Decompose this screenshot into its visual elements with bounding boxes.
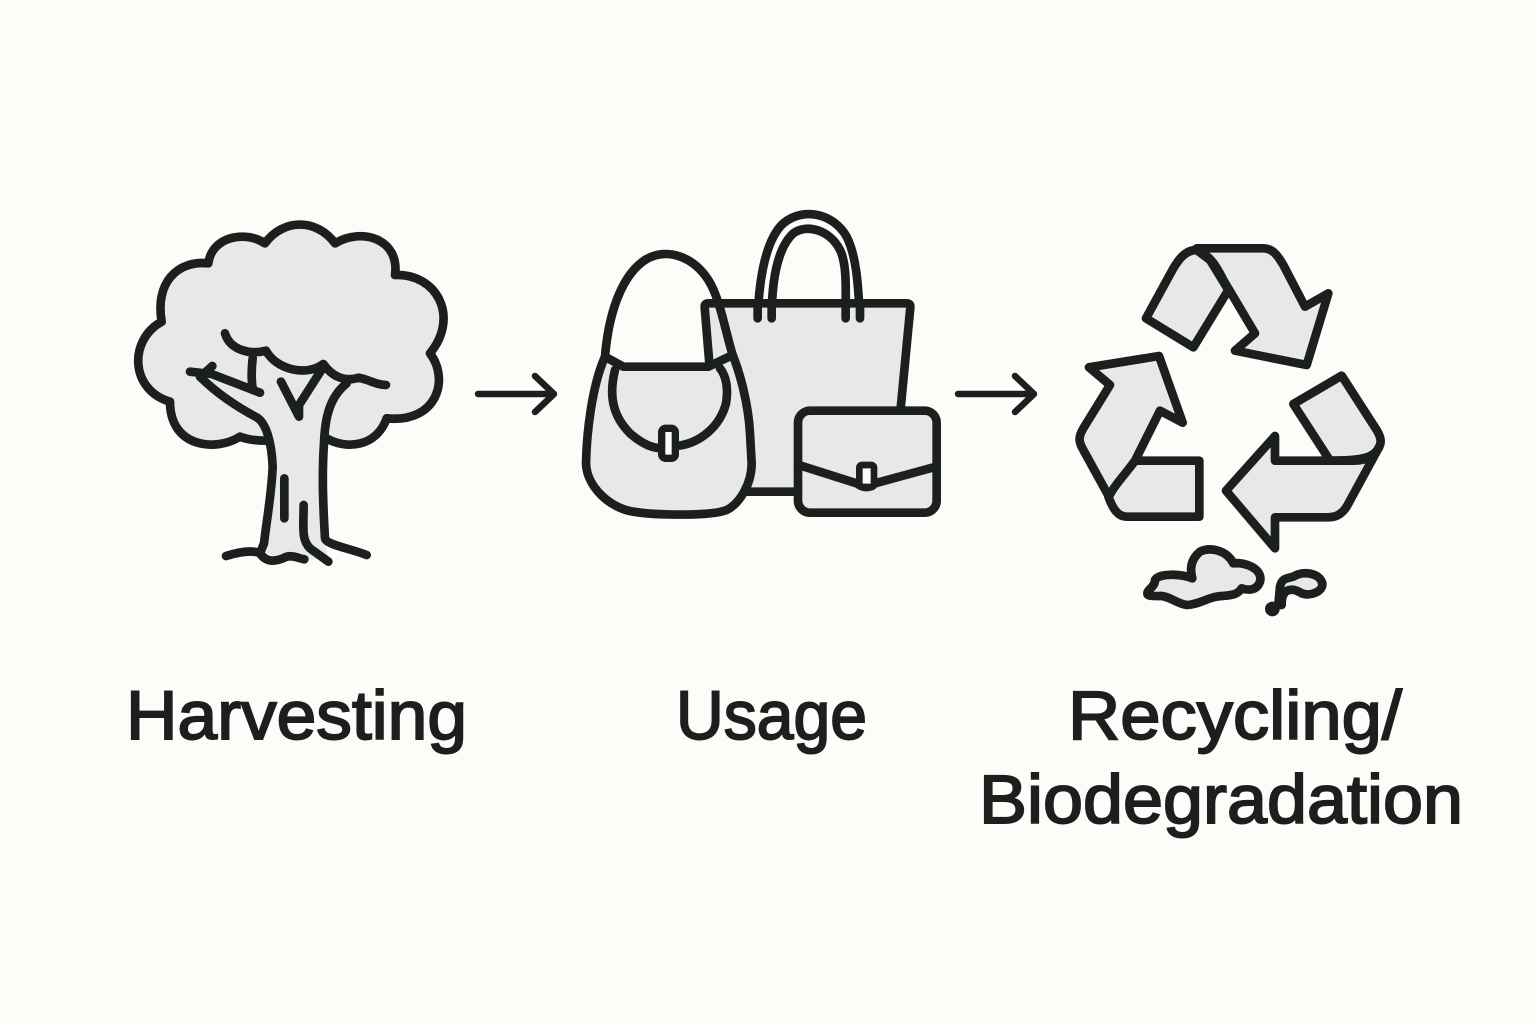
left arrow tail [1108,461,1199,517]
hobo bag flap [612,368,727,448]
wallet flap [801,466,936,487]
right arrow tail [1293,376,1381,461]
label: Recycling/Biodegradation: Recycling/ [1068,677,1403,754]
hobo bag clasp [662,428,675,458]
right arrow head [1226,436,1379,548]
arrow: usage to recycling [958,376,1034,412]
icon: bags [586,214,937,515]
tree trunk fill [203,353,347,560]
trunk fork [281,371,321,417]
left branches [190,358,260,393]
label: Recycling/Biodegradation: Biodegradation [979,761,1463,838]
hobo bag strap [605,254,733,357]
top arrow head [1197,248,1328,365]
icon: tree [138,225,444,562]
tote bag handles [758,214,860,318]
bark lines [284,478,328,562]
small soil clump [1278,573,1322,605]
top arrow tail [1146,250,1228,347]
tree canopy [138,225,444,445]
tree trunk left edge [200,377,273,553]
arrow: harvesting to usage [478,376,554,412]
left arrow head [1080,356,1183,497]
tote bag [704,303,910,493]
wallet [798,411,937,513]
label: Harvesting: Harvesting [126,677,467,754]
icon: recycling symbol [1080,248,1381,616]
wallet clasp [859,465,874,487]
hobo bag [586,355,752,515]
label: Usage: Usage [676,677,867,754]
soil mound [1147,549,1260,605]
canopy underside arc [225,333,386,385]
tree roots [226,552,304,561]
tree trunk right edge [323,383,367,555]
label: Recycling/Biodegradation [979,677,1463,838]
